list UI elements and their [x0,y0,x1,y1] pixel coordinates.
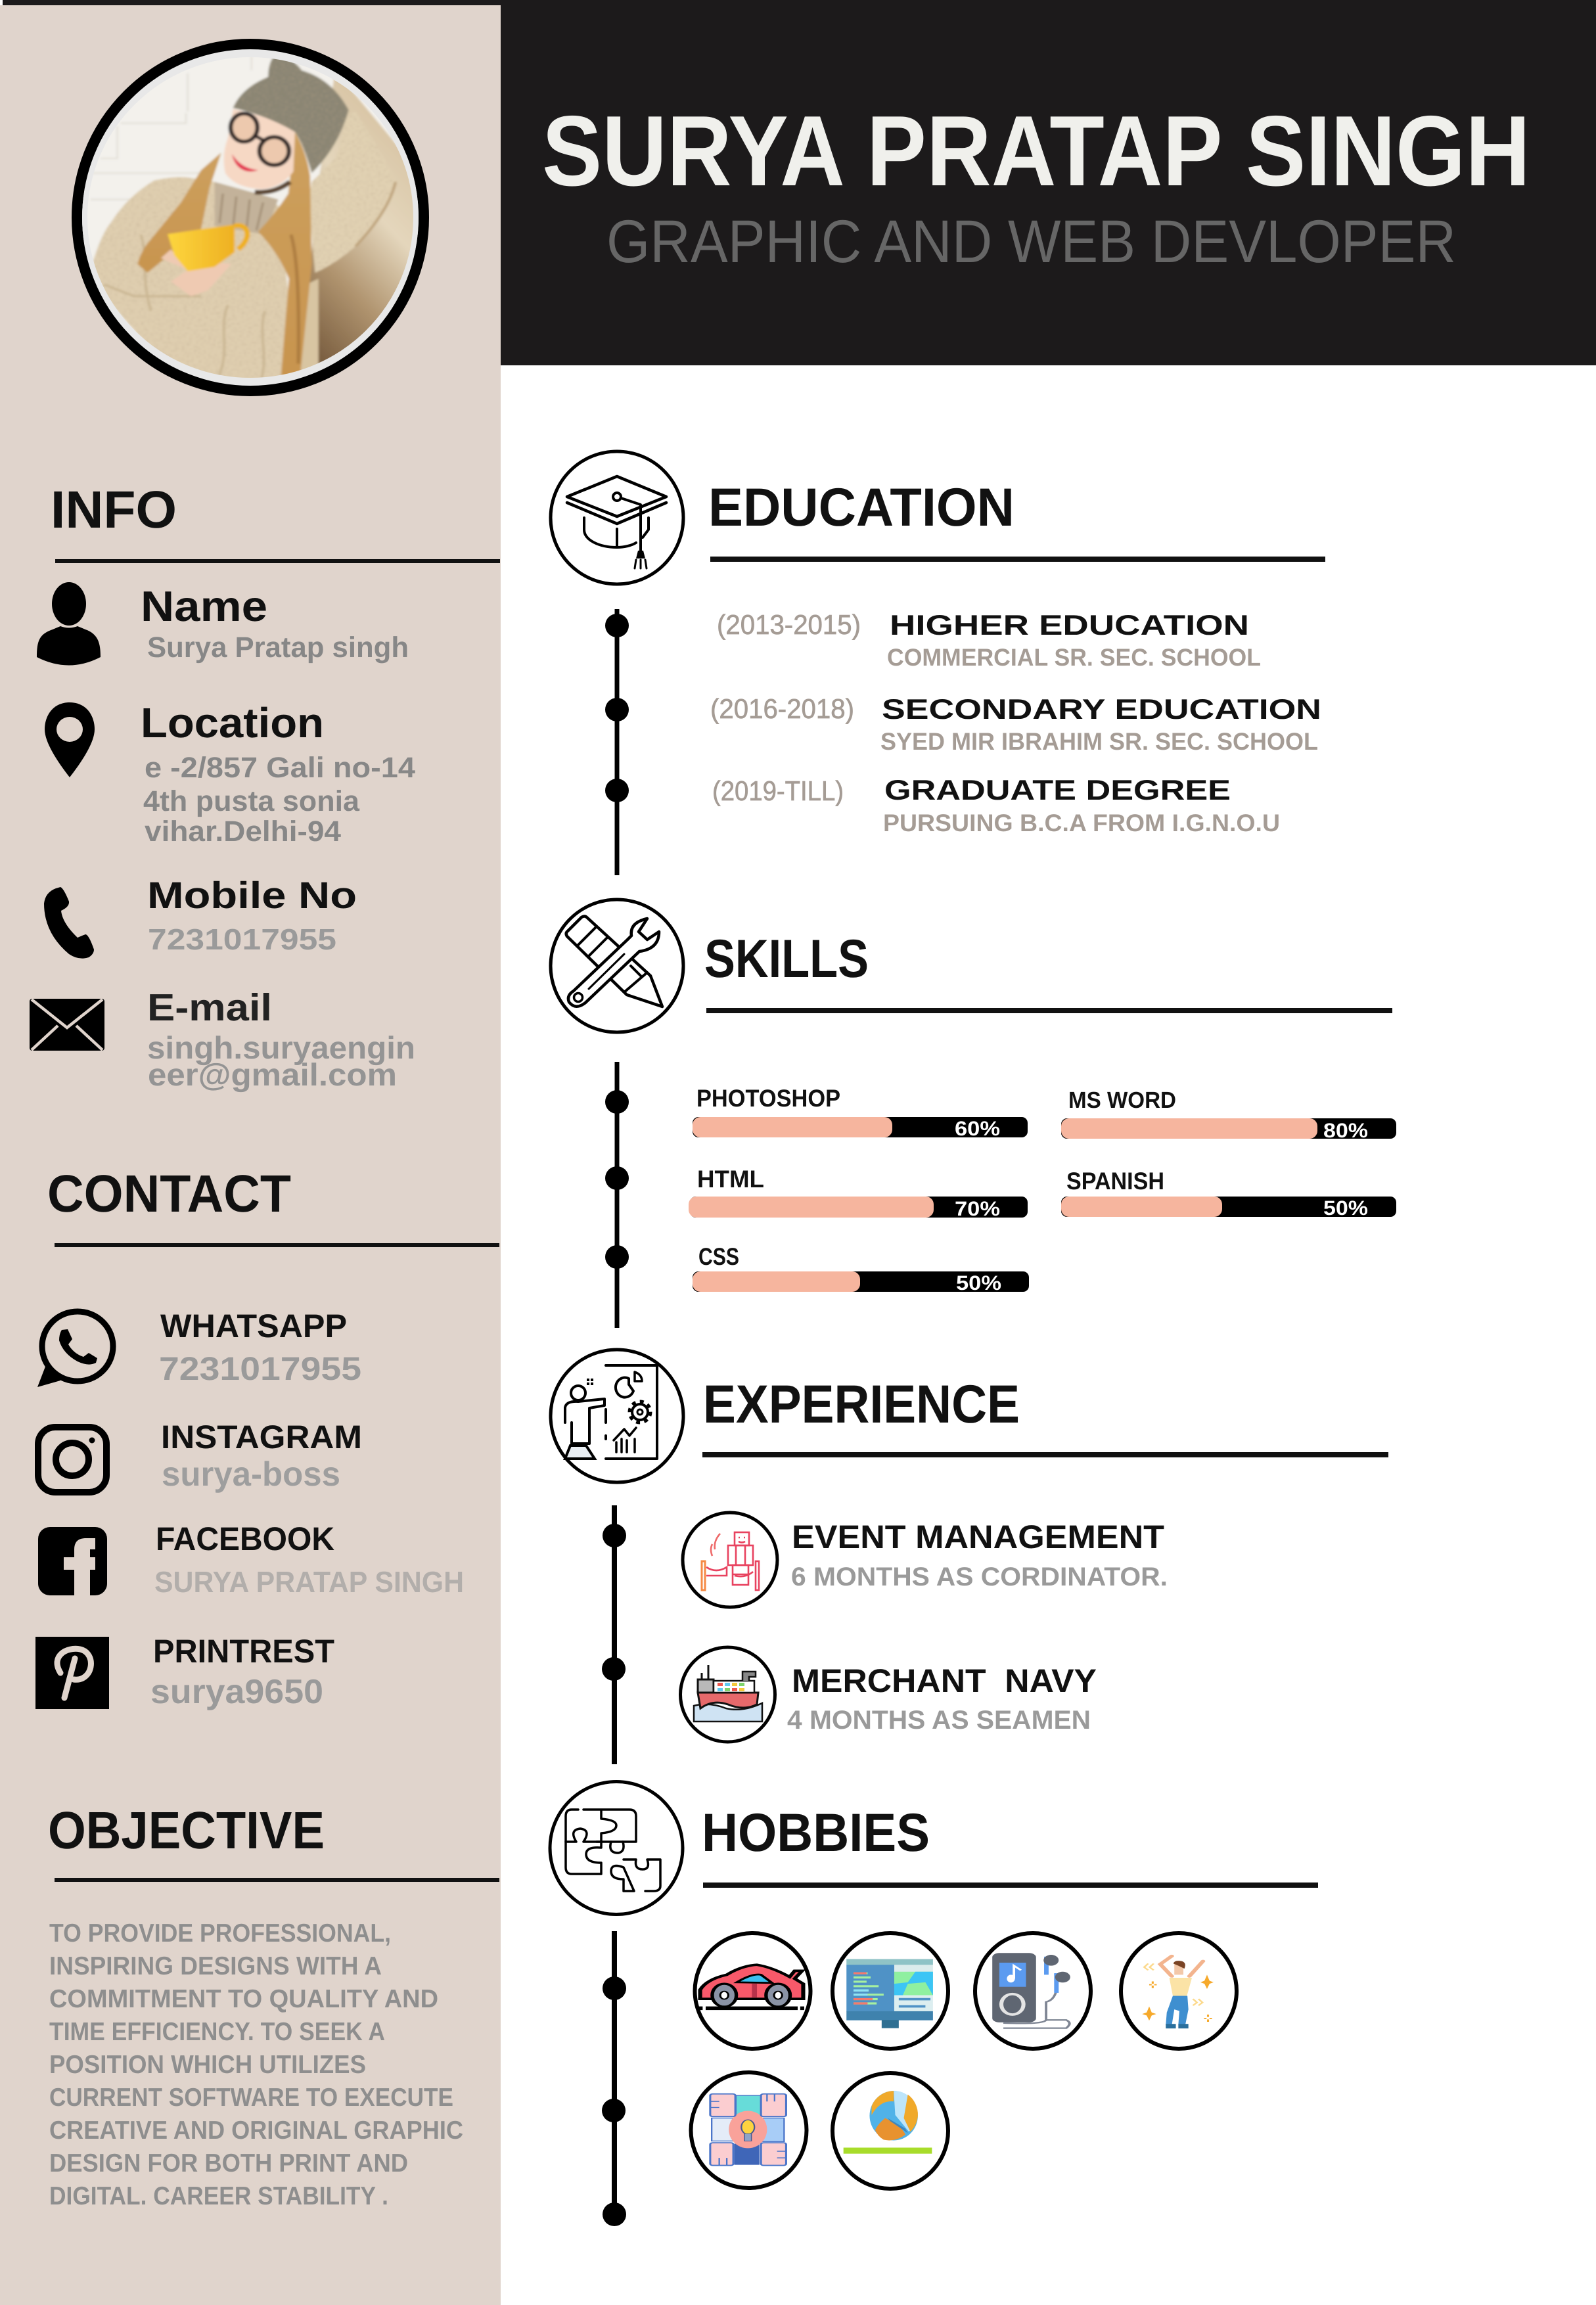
heading: EDUCATION: EDUCATION [708,478,1015,537]
heading: HOBBIES: HOBBIES [702,1803,930,1863]
education entry: higher education: (2013-2015) [717,609,861,640]
education entry: higher education: COMMERCIAL SR. SEC. SCHOOL [887,644,1261,671]
contact: pinterest: PRINTREST [153,1633,334,1670]
skill bar: photoshop: PHOTOSHOP [696,1085,840,1112]
experience: event management: EVENT MANAGEMENT [792,1518,1164,1555]
skill bar: spanish [1061,1168,1396,1220]
text block: objective: COMMITMENT TO QUALITY AND [49,1985,438,2013]
education entry: graduate degree: (2019-TILL) [712,775,844,806]
skill bar: html: HTML [697,1166,764,1193]
icon: graduation cap [551,451,683,584]
info: email: E-mail [147,986,272,1029]
text block: objective [49,1919,463,2210]
skill bar: ms word: 80% [1323,1119,1368,1142]
experience: merchant navy: 4 MONTHS AS SEAMEN [787,1706,1091,1735]
hobby icon: code screen [832,1933,948,2049]
experience timeline [602,1505,626,1764]
header band [3,0,1596,365]
info: location: vihar.Delhi-94 [145,815,342,848]
education timeline [605,609,629,875]
contact: instagram: surya-boss [162,1455,340,1494]
experience: event management [791,1518,1168,1591]
contact: whatsapp: WHATSAPP [160,1308,347,1344]
skill bar: ms word [1061,1087,1396,1142]
icon: instagram [38,1427,106,1492]
hobby icon: dancer [1121,1933,1237,2049]
contact: facebook: FACEBOOK [156,1520,334,1557]
hobby icon: car [695,1933,811,2049]
text block: objective: CREATIVE AND ORIGINAL GRAPHIC [49,2116,463,2145]
contact: facebook [154,1520,464,1599]
experience: merchant navy [787,1662,1097,1735]
info: email: singh.suryaengin [147,1031,415,1066]
text block: objective: INSPIRING DESIGNS WITH A [49,1952,382,1980]
info: email: eer@gmail.com [148,1058,397,1093]
education entry: secondary education: (2016-2018) [710,693,854,724]
hobbies timeline [602,1931,626,2226]
skill bar: spanish: 50% [1323,1197,1368,1220]
text block: objective: TO PROVIDE PROFESSIONAL, [49,1919,391,1948]
heading: OBJECTIVE: OBJECTIVE [48,1801,325,1860]
icon: tools [551,900,683,1032]
info: mobile: 7231017955 [148,923,336,956]
experience: event management: 6 MONTHS AS CORDINATOR. [791,1563,1168,1591]
icon: event management [683,1513,777,1607]
skill bar: css: CSS [698,1243,739,1270]
icon: envelope [30,999,104,1051]
info: location: e -2/857 Gali no-14 [145,752,416,784]
skill bar: photoshop [693,1085,1028,1140]
skill bar: html [689,1166,1028,1220]
contact: whatsapp: 7231017955 [159,1350,361,1387]
info: location: 4th pusta sonia [143,785,360,817]
info: name [141,582,409,664]
icon: location pin [45,702,95,777]
contact: facebook: SURYA PRATAP SINGH [154,1565,464,1599]
icon: presenter with board [551,1350,683,1482]
skill bar: photoshop: 60% [955,1117,1000,1140]
education entry: secondary education [710,693,1321,755]
icon: person [37,582,101,665]
text block: objective: DIGITAL. CAREER STABILITY . [49,2182,388,2210]
info: mobile: Mobile No [147,875,357,917]
education entry: secondary education: SYED MIR IBRAHIM SR. SEC. SCHOOL [880,728,1318,755]
skills timeline [605,1062,629,1328]
text block: objective: POSITION WHICH UTILIZES [49,2051,366,2079]
info: location [141,699,416,848]
info: name: Name [141,582,267,630]
text block: objective: DESIGN FOR BOTH PRINT AND [49,2149,408,2178]
skill bar: css [693,1243,1029,1294]
info: email [147,986,415,1093]
icon: whatsapp [37,1312,113,1387]
icon: phone [44,887,94,959]
heading: INFO: INFO [51,480,177,539]
education entry: graduate degree: GRADUATE DEGREE [884,775,1231,806]
education entry: higher education: HIGHER EDUCATION [890,610,1249,641]
icon: pinterest [35,1637,109,1709]
hobby icon: volleyball [832,2073,948,2189]
text block: objective: TIME EFFICIENCY. TO SEEK A [49,2018,385,2046]
profile photo [67,44,429,396]
hobby icon: teamwork bulb [691,2072,807,2188]
info: mobile [147,875,357,956]
experience: merchant navy: MERCHANT NAVY [792,1662,1097,1699]
skill bar: spanish: SPANISH [1066,1168,1164,1195]
hobby icon: music player [975,1933,1091,2049]
contact: instagram: INSTAGRAM [161,1419,362,1455]
icon: ship [681,1647,775,1742]
contact: pinterest: surya9650 [150,1673,323,1711]
heading: EXPERIENCE: EXPERIENCE [703,1375,1020,1434]
contact: pinterest [150,1633,334,1711]
info: location: Location [141,699,324,746]
education entry: secondary education: SECONDARY EDUCATION [882,694,1321,725]
education entry: graduate degree: PURSUING B.C.A FROM I.G.N.O.U [883,810,1280,836]
skill bar: css: 50% [956,1271,1001,1294]
info: name: Surya Pratap singh [147,631,409,664]
heading: SKILLS: SKILLS [704,929,869,989]
contact: whatsapp [159,1308,361,1387]
heading: CONTACT: CONTACT [47,1164,291,1223]
left sidebar panel [0,5,501,2305]
text block: objective: CURRENT SOFTWARE TO EXECUTE [49,2084,453,2112]
subtitle: job title: GRAPHIC AND WEB DEVLOPER [606,208,1456,275]
icon: puzzle [550,1782,683,1915]
education entry: higher education [717,609,1261,671]
skill bar: html: 70% [955,1197,1000,1220]
education entry: graduate degree [712,775,1280,836]
icon: facebook [38,1527,107,1595]
contact: instagram [161,1419,362,1494]
skill bar: ms word: MS WORD [1068,1087,1176,1113]
